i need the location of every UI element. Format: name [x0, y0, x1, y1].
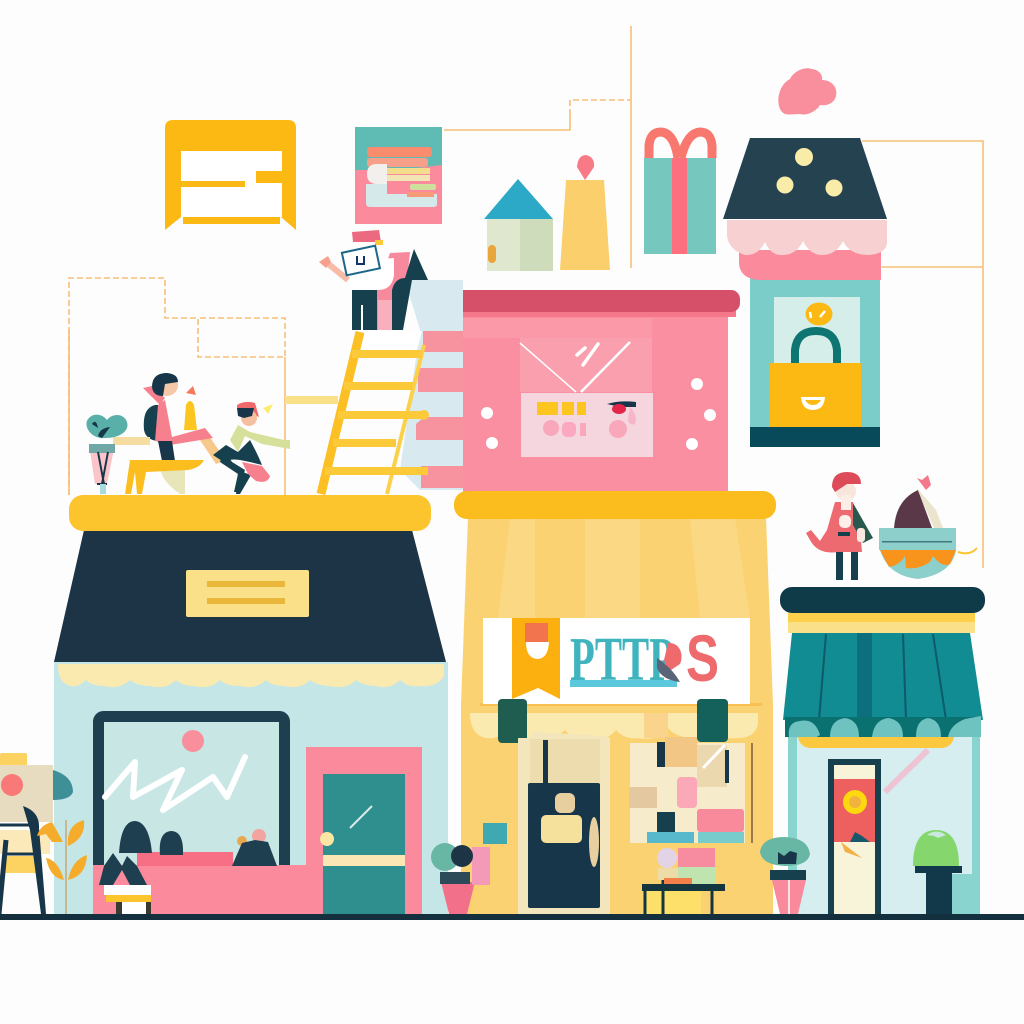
sign board: S: [686, 621, 719, 695]
sign board: PTTP: [570, 626, 674, 694]
scalloped awning: [470, 713, 758, 739]
window panel: [520, 338, 653, 457]
person: worker with sign: [319, 230, 428, 330]
icon: shopping tag: [560, 155, 610, 270]
icon: small house: [484, 179, 553, 271]
door: [518, 732, 610, 914]
person: vendor on right roof: [806, 472, 873, 580]
lamp: [913, 830, 962, 915]
lamp stand left: [0, 753, 73, 914]
shop: yellow awning building: [454, 491, 776, 914]
icon: cloud: [778, 68, 836, 115]
door: [306, 747, 422, 914]
door: [828, 759, 881, 917]
ground line: [0, 914, 1024, 920]
ladder: [285, 331, 429, 494]
pink counter: [93, 821, 306, 914]
icon: plant left of yellow shop: [431, 843, 490, 914]
table with cake: [642, 848, 725, 914]
icon: yellow bag: [770, 302, 861, 427]
shop: pink building: [438, 290, 740, 492]
icon: bowl with dome: [879, 475, 977, 579]
shop: teal awning building: [780, 587, 985, 917]
shop: top right tower: [723, 138, 887, 447]
window: [629, 737, 753, 843]
icon: yellow sign: [165, 120, 296, 230]
sign board: [483, 618, 750, 704]
window: [98, 716, 284, 872]
icon: picture card: [355, 127, 442, 224]
icon: potted plant on roof: [86, 415, 150, 494]
shop: navy roof building: [54, 495, 448, 914]
people: seated pair: [125, 373, 290, 494]
stairs: [400, 280, 463, 490]
icon: yellow branch plant: [37, 820, 87, 914]
icon: gift box: [644, 132, 716, 254]
icon: plant right of yellow shop: [760, 837, 810, 914]
